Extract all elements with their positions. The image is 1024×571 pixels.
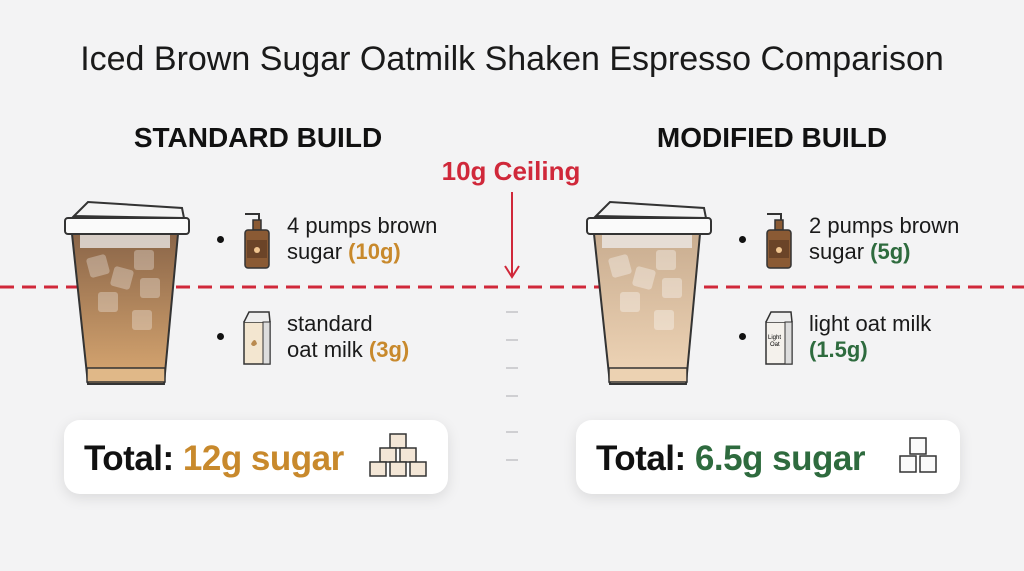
icon: milk carton — [243, 311, 271, 365]
item: brown sugar pumps standard — [217, 213, 437, 269]
title: Iced Brown Sugar Oatmilk Shaken Espresso Comparison — [80, 40, 944, 78]
item: light oat milk: light oat milk — [809, 311, 931, 336]
arrow: ceiling pointer — [504, 192, 520, 279]
heading: standard build: STANDARD BUILD — [134, 122, 382, 153]
item: brown sugar pumps standard: 4 pumps brown sugar (10g) — [287, 213, 437, 264]
total box: modified — [576, 420, 960, 494]
icon: pump bottle — [766, 213, 792, 269]
item: brown sugar pumps modified: 2 pumps brown sugar (5g) — [809, 213, 959, 264]
item: standard oat milk: oat milk (3g) — [287, 337, 409, 362]
total box: modified: Total: 6.5g sugar — [596, 439, 865, 478]
icon: light oat carton: Light — [768, 335, 781, 341]
item: standard oat milk: standard — [287, 311, 373, 336]
icon: sugar cubes — [899, 437, 937, 473]
icon: pump bottle — [244, 213, 270, 269]
center scale ticks — [506, 311, 518, 461]
item: standard oat milk — [217, 311, 409, 365]
total box: standard: Total: 12g sugar — [84, 439, 344, 478]
icon: light oat carton: Oat — [770, 342, 780, 348]
heading: modified build: MODIFIED BUILD — [657, 122, 887, 153]
item: brown sugar pumps modified — [739, 213, 959, 269]
item: light oat milk — [739, 311, 932, 365]
icon: light oat carton — [765, 311, 793, 365]
item: light oat milk: (1.5g) — [809, 337, 868, 362]
total box: standard — [64, 420, 448, 494]
ceiling dashed line — [0, 286, 1024, 288]
cup: standard — [64, 201, 190, 385]
ceiling label: 10g Ceiling — [442, 156, 580, 186]
icon: sugar cubes pyramid — [369, 433, 427, 477]
cup: modified — [586, 201, 712, 385]
